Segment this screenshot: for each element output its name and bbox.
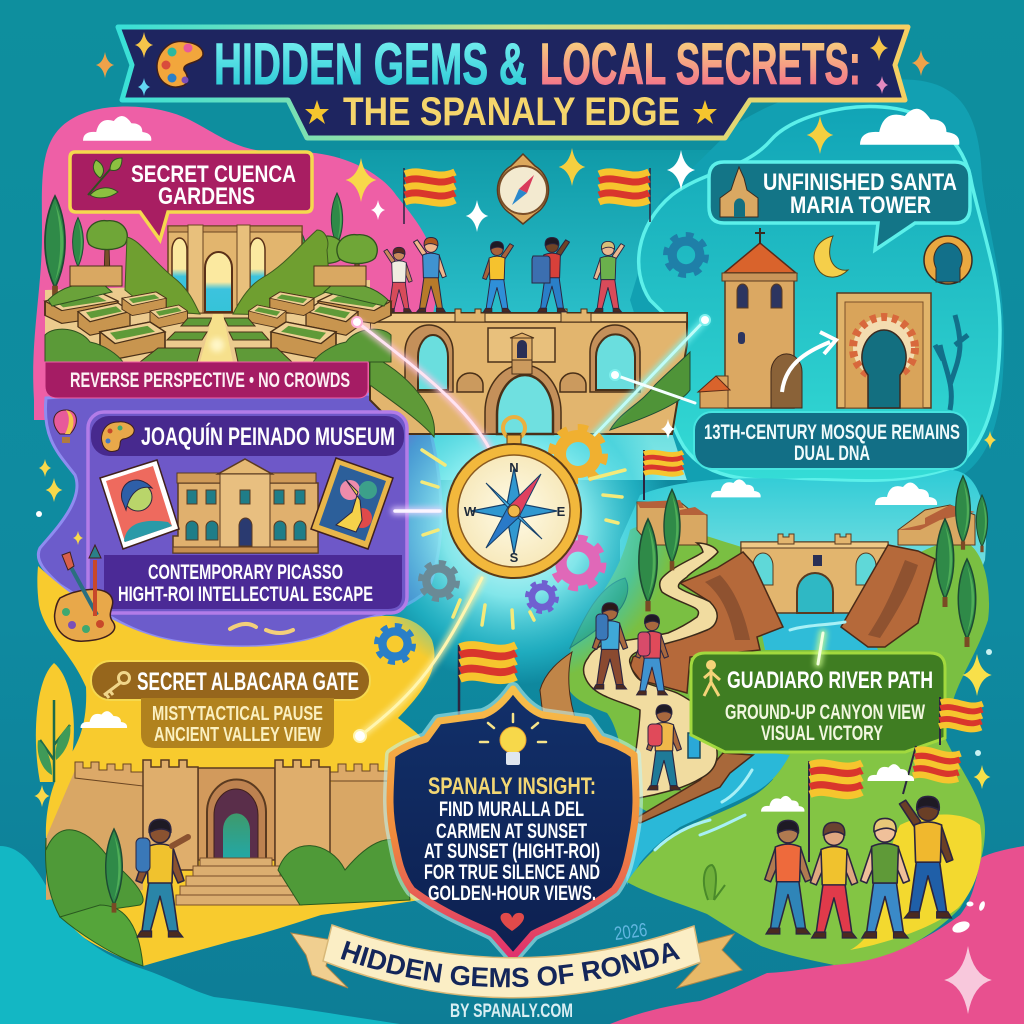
clouds (711, 479, 937, 505)
icon: light bulb (480, 714, 546, 765)
icon: compass light rays (422, 450, 625, 628)
connector lines (352, 315, 823, 742)
gate caption: ANCIENT VALLEY VIEW (154, 724, 321, 746)
portrait right (311, 458, 393, 549)
icon: sparkles and tree left (34, 663, 127, 807)
walkers (384, 238, 625, 312)
panel: landscape sky (620, 470, 986, 650)
icon: palette small (102, 422, 134, 451)
panel: spanaly insight shield (390, 689, 636, 957)
insight body: FIND MURALLA DEL (439, 798, 584, 821)
museum building (173, 459, 318, 553)
icon: palette (157, 41, 203, 87)
panel: pink garden blob (33, 106, 437, 420)
flags (644, 450, 983, 862)
icon: compass ring: W (464, 504, 477, 519)
callout (691, 653, 945, 752)
panel: right cyan blob (639, 107, 1000, 481)
insight body: FOR TRUE SILENCE AND (424, 861, 600, 884)
icon: gears around compass (421, 428, 604, 611)
flags (404, 168, 650, 224)
gate caption (141, 698, 334, 748)
hikers (592, 603, 700, 790)
year: 2026 (613, 920, 649, 945)
cliffs (540, 545, 935, 823)
ribbon tails (291, 933, 742, 988)
upper river (757, 610, 878, 650)
bottom ribbon (290, 924, 743, 998)
panel: bottom-left cyan wave (0, 846, 400, 1024)
callout (709, 162, 970, 250)
icon: pink sparkle (944, 900, 992, 1014)
mosque arch (837, 293, 931, 408)
distant bridge (741, 534, 888, 613)
landscape trees (639, 476, 988, 647)
icon: meadow details (704, 764, 914, 900)
icon: bare tree (935, 315, 968, 410)
gate caption: MISTYTACTICAL PAUSE (152, 703, 323, 725)
museum heading bar (91, 416, 404, 456)
right terraces (249, 266, 391, 362)
callout: UNFINISHED SANTA (763, 169, 957, 196)
panel: joaquin peinado museum (36, 410, 407, 641)
icon: banner sparkles (96, 32, 930, 96)
ribbon curve guide (339, 950, 705, 987)
title banner (96, 27, 930, 138)
panel: Ronda bridge with walkers (370, 154, 690, 437)
panel: secret albacara gate (34, 661, 410, 966)
panel: lower green meadow (627, 738, 985, 965)
icon: museum sparkles (36, 459, 83, 545)
panel: right outer teal blob (630, 79, 1004, 490)
caption (694, 412, 968, 469)
icon: walker (704, 662, 720, 696)
caption: DUAL DNA (794, 442, 870, 465)
left terraces (45, 266, 187, 362)
icon: right sparkles (661, 419, 996, 789)
bridge (370, 309, 690, 437)
icon: clouds and sparkles top (83, 109, 959, 232)
icon: heart (500, 913, 524, 931)
museum heading bar: JOAQUÍN PEINADO MUSEUM (141, 422, 395, 451)
icon: green bush on hill (570, 578, 628, 648)
panel: unfinished santa maria tower (666, 162, 972, 469)
callout heading: SECRET CUENCA (131, 161, 296, 188)
callout: VISUAL VICTORY (761, 722, 883, 745)
caption bar: REVERSE PERSPECTIVE • NO CROWDS (70, 369, 350, 392)
icon: gear (666, 235, 706, 275)
callout: MARIA TOWER (790, 192, 931, 219)
villages (637, 500, 975, 545)
icon: key (104, 672, 130, 698)
panel: secret cuenca gardens (45, 152, 391, 398)
icon: compass ring: N (509, 460, 519, 475)
ribbon body (323, 925, 701, 998)
winding path (584, 543, 718, 800)
arrow (782, 332, 836, 392)
icon: blue gear (377, 626, 413, 662)
icon: leaves (88, 158, 122, 198)
gate heading (91, 661, 370, 700)
icon: compass medallion (497, 154, 549, 224)
caption bar: CONTEMPORARY PICASSO (148, 561, 343, 584)
subtitle: THE SPANALY EDGE (343, 90, 680, 134)
fortress illustration (46, 760, 410, 966)
insight heading: SPANALY INSIGHT: (428, 773, 596, 800)
panel: upper green hillside (567, 525, 989, 817)
icon: arch (924, 236, 972, 284)
gate heading: SECRET ALBACARA GATE (137, 668, 359, 696)
icon: glow around compass (354, 365, 674, 685)
portrait left (100, 460, 179, 549)
panel: purple museum blob (38, 393, 441, 647)
icon: compass ring: S (510, 550, 519, 565)
caption bar (104, 555, 402, 609)
panel: central sky behind bridge (340, 150, 720, 480)
callout (70, 152, 312, 240)
river ripples (655, 622, 845, 850)
panel: lower right pink wave (610, 846, 1024, 1024)
callout: GUADIARO RIVER PATH (727, 667, 933, 694)
title line one: HIDDEN GEMS & (214, 32, 527, 97)
icon: compass ring: E (557, 504, 566, 519)
ribbon text: HIDDEN GEMS OF RONDA (340, 940, 680, 988)
garden illustration (45, 193, 391, 362)
insight body: AT SUNSET (HIGHT-ROI) (424, 840, 600, 863)
panel: central compass (421, 417, 625, 628)
insight body (424, 798, 600, 905)
insight body: GOLDEN-HOUR VIEWS. (428, 882, 596, 905)
group of friends (765, 796, 953, 938)
tower (698, 228, 802, 408)
byline: BY SPANALY.COM (450, 1001, 573, 1022)
icon: compass ring (447, 417, 581, 578)
wavy marks under museum (230, 624, 293, 633)
icon: church (720, 167, 758, 217)
caption bar: HIGHT-ROI INTELLECTUAL ESCAPE (118, 583, 373, 606)
insight body: CARMEN AT SUNSET (436, 820, 587, 843)
callout: GROUND-UP CANYON VIEW (725, 701, 925, 724)
meadow yellow patch (850, 814, 982, 950)
icon: hot air balloon (54, 410, 76, 443)
caption bar (45, 362, 368, 398)
callout heading line two: GARDENS (158, 183, 255, 210)
flag above shield (459, 645, 516, 720)
panel frame (88, 412, 407, 613)
panel: yellow albacara blob (37, 566, 434, 966)
panel: guadiaro river landscape (540, 419, 996, 938)
icon: moon (814, 236, 848, 277)
icon: palette and brushes (55, 545, 115, 641)
icon: subtitle stars (305, 100, 717, 124)
panel: river (622, 750, 790, 885)
